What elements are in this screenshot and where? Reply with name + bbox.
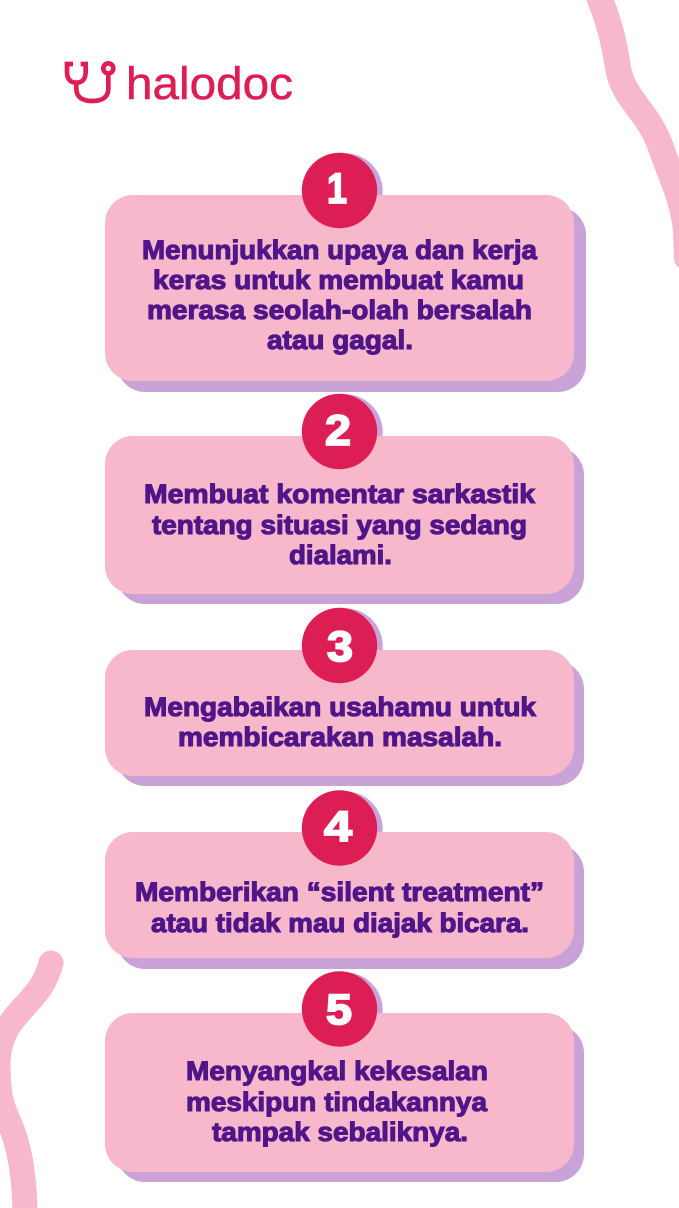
item 2 text: Membuat komentar sarkastik bbox=[144, 479, 536, 509]
number 3: 3 bbox=[327, 623, 353, 671]
item 1 text: keras untuk membuat kamu bbox=[153, 265, 524, 295]
item 5 text: meskipun tindakannya bbox=[186, 1087, 488, 1117]
panel: item 3 bbox=[105, 608, 584, 786]
item 5 text: tampak sebaliknya. bbox=[212, 1117, 468, 1147]
item 5 text bbox=[186, 1056, 488, 1147]
panel: item 4 bbox=[105, 790, 584, 969]
item 3 text bbox=[144, 692, 537, 752]
decorative squiggle: top right bbox=[597, 0, 679, 258]
item 3 text: membicarakan masalah. bbox=[178, 722, 502, 752]
item 2 text bbox=[144, 479, 536, 570]
number 1: 1 bbox=[327, 165, 347, 213]
logo wordmark: halodoc bbox=[126, 58, 293, 109]
item 1 text bbox=[142, 235, 538, 355]
decorative squiggle: bottom left bbox=[0, 963, 51, 1208]
item 2 text: dialami. bbox=[289, 540, 392, 570]
panel: item 2 bbox=[105, 394, 584, 604]
item 4 text: Memberikan “silent treatment” bbox=[135, 877, 544, 907]
panel: item 1 bbox=[105, 153, 586, 392]
icon: stethoscope bbox=[67, 63, 113, 101]
number 5: 5 bbox=[326, 986, 352, 1034]
panel: item 5 bbox=[105, 971, 584, 1182]
item 1 text: atau gagal. bbox=[267, 325, 413, 355]
item 1 text: merasa seolah-olah bersalah bbox=[147, 295, 532, 325]
number 4: 4 bbox=[324, 803, 352, 851]
item 1 text: Menunjukkan upaya dan kerja bbox=[142, 235, 538, 265]
logo: halodoc bbox=[67, 58, 293, 109]
item 5 text: Menyangkal kekesalan bbox=[186, 1056, 488, 1086]
item 2 text: tentang situasi yang sedang bbox=[152, 510, 527, 540]
item 4 text: atau tidak mau diajak bicara. bbox=[151, 908, 529, 938]
item 3 text: Mengabaikan usahamu untuk bbox=[144, 692, 537, 722]
item 4 text bbox=[135, 877, 544, 938]
number 2: 2 bbox=[325, 407, 351, 455]
